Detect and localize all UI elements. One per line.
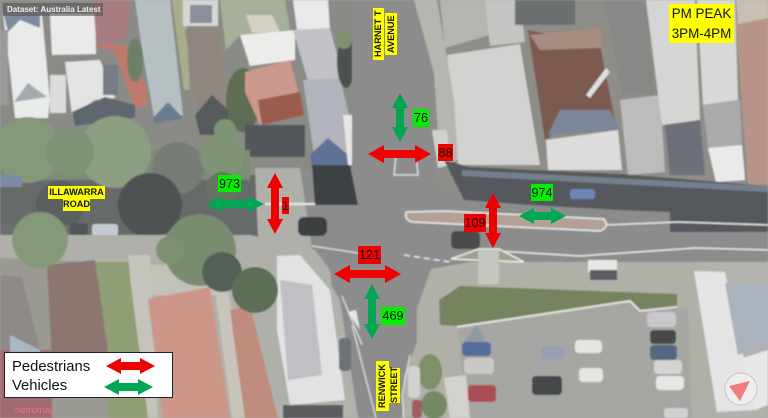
south-west area (0, 235, 345, 418)
arrow: Illawarra pedestrians (267, 173, 283, 234)
count: east vehicles 974: 974 (531, 186, 552, 200)
legend (4, 352, 173, 398)
count: Harnett vehicles 76: 76 (414, 111, 428, 125)
street label: Harnett Avenue (373, 8, 397, 60)
street label: Renwick Street: RENWICK (377, 364, 387, 408)
legend text: Vehicles: Vehicles (12, 378, 67, 394)
road markings (406, 211, 606, 231)
roads (250, 0, 768, 418)
street label: Harnett Avenue: HARNET T (373, 11, 383, 57)
south-east area (402, 262, 715, 418)
north-west trees (0, 150, 250, 180)
count: Illawarra vehicles 973: 973 (219, 177, 240, 191)
north-east buildings (437, 0, 768, 190)
street label: Harnett Avenue: AVENUE (386, 15, 396, 53)
cars (462, 342, 491, 356)
count: Illawarra pedestrians 1: 1 (282, 199, 289, 213)
count: Harnett vehicles 76 (413, 109, 429, 127)
count: Renwick pedestrians 121: 121 (359, 248, 380, 262)
attribution: dataset (3, 3, 103, 16)
count: east pedestrians 109: 109 (464, 216, 486, 230)
count: Harnett pedestrians 88: 88 (438, 146, 452, 160)
attribution: dataset: Dataset: Australia Latest (7, 5, 101, 14)
attribution: map logo: netromap (15, 405, 55, 416)
title: PM peak time label: PM PEAK (672, 6, 731, 21)
street label: Illawarra Road: ROAD (63, 199, 90, 209)
title: PM peak time label: 3PM-4PM (672, 26, 731, 40)
legend text: Pedestrians: Pedestrians (12, 359, 90, 375)
street label: Illawarra Road: ILLAWARRA (49, 187, 104, 197)
street label: Renwick Street (376, 361, 400, 411)
legend arrows (104, 358, 155, 395)
count: Renwick vehicles 469 (381, 307, 405, 325)
street label: Illawarra Road (48, 186, 105, 211)
arrow: Renwick vehicles (364, 284, 380, 339)
dark east lane (444, 160, 768, 232)
street label: Renwick Street: STREET (389, 367, 399, 403)
arrow: east pedestrians (485, 193, 501, 248)
pavement east of Harnett (414, 0, 458, 165)
arrow: Harnett vehicles (392, 93, 408, 142)
arrow: Harnett pedestrians (368, 145, 431, 163)
arrow: east vehicles (519, 208, 566, 224)
title: PM peak time label (669, 4, 734, 43)
count: Renwick vehicles 469: 469 (382, 309, 404, 323)
north-west houses (0, 0, 355, 170)
arrow: Illawarra vehicles (206, 196, 264, 212)
arrow: Renwick pedestrians (334, 265, 401, 283)
